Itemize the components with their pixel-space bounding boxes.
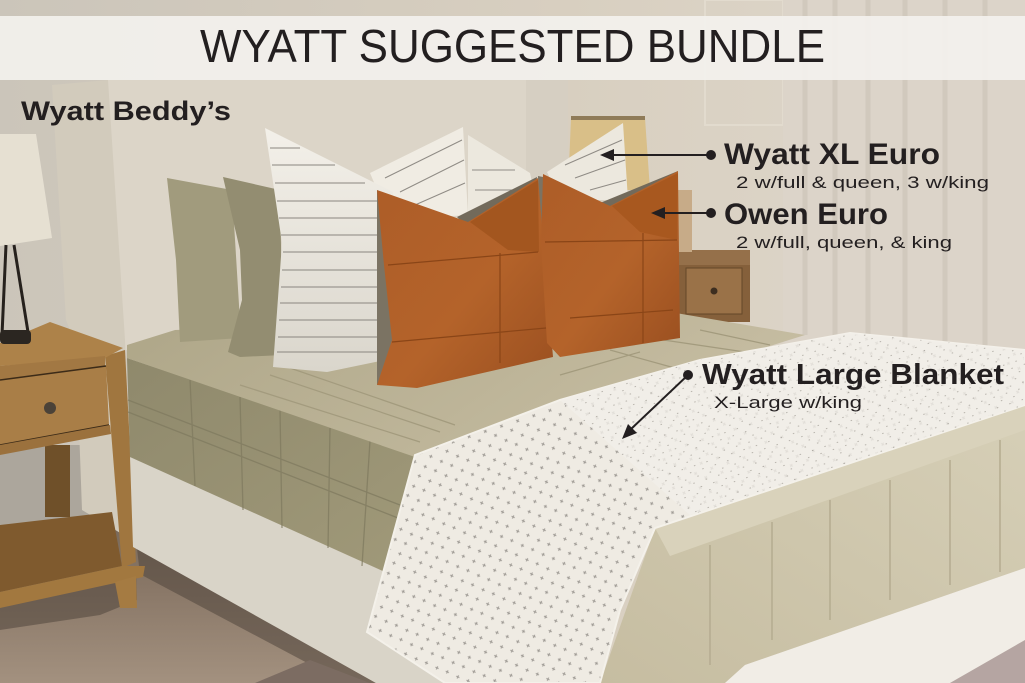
Wyatt large blanket — [367, 333, 1025, 683]
callout: Wyatt XL Euro: Wyatt XL Euro — [724, 138, 940, 171]
right pillow — [541, 171, 680, 357]
olive pillows — [167, 177, 283, 357]
callout: Wyatt Large Blanket — [622, 359, 1004, 439]
curtains — [783, 0, 1025, 352]
callout: Wyatt XL Euro: 2 w/full & queen, 3 w/king — [736, 173, 989, 192]
callout: Owen Euro: Owen Euro — [724, 198, 888, 231]
grey gussets — [457, 177, 537, 230]
olive bedding — [127, 312, 805, 572]
brand label: Wyatt Beddy’s — [21, 96, 231, 126]
bed frame — [130, 457, 445, 683]
left pillow — [377, 178, 553, 388]
title banner — [0, 16, 1025, 80]
front face — [127, 358, 415, 572]
left nightstand — [0, 322, 145, 608]
top panel — [127, 312, 805, 457]
callout: Owen Euro: 2 w/full, queen, & king — [736, 233, 952, 252]
title: WYATT SUGGESTED BUNDLE — [200, 20, 825, 72]
lower white bed rail — [725, 568, 1025, 683]
left lamp — [0, 134, 52, 344]
headboard — [52, 80, 568, 540]
Wyatt XL Euro pillows — [265, 123, 628, 372]
callout: Wyatt Large Blanket: X-Large w/king — [714, 393, 862, 412]
Owen Euro leather pillows — [377, 171, 680, 388]
callout: Owen Euro — [651, 198, 952, 252]
callout: Wyatt Large Blanket: Wyatt Large Blanket — [702, 359, 1004, 391]
callout: Wyatt XL Euro — [600, 138, 989, 192]
right table lamp — [568, 116, 650, 190]
floor rug — [255, 640, 1025, 683]
olive side panel of mattress — [600, 405, 1025, 683]
right nightstand — [676, 190, 750, 322]
floor shadow under nightstand and bed frame — [0, 548, 376, 683]
floor — [0, 530, 376, 683]
